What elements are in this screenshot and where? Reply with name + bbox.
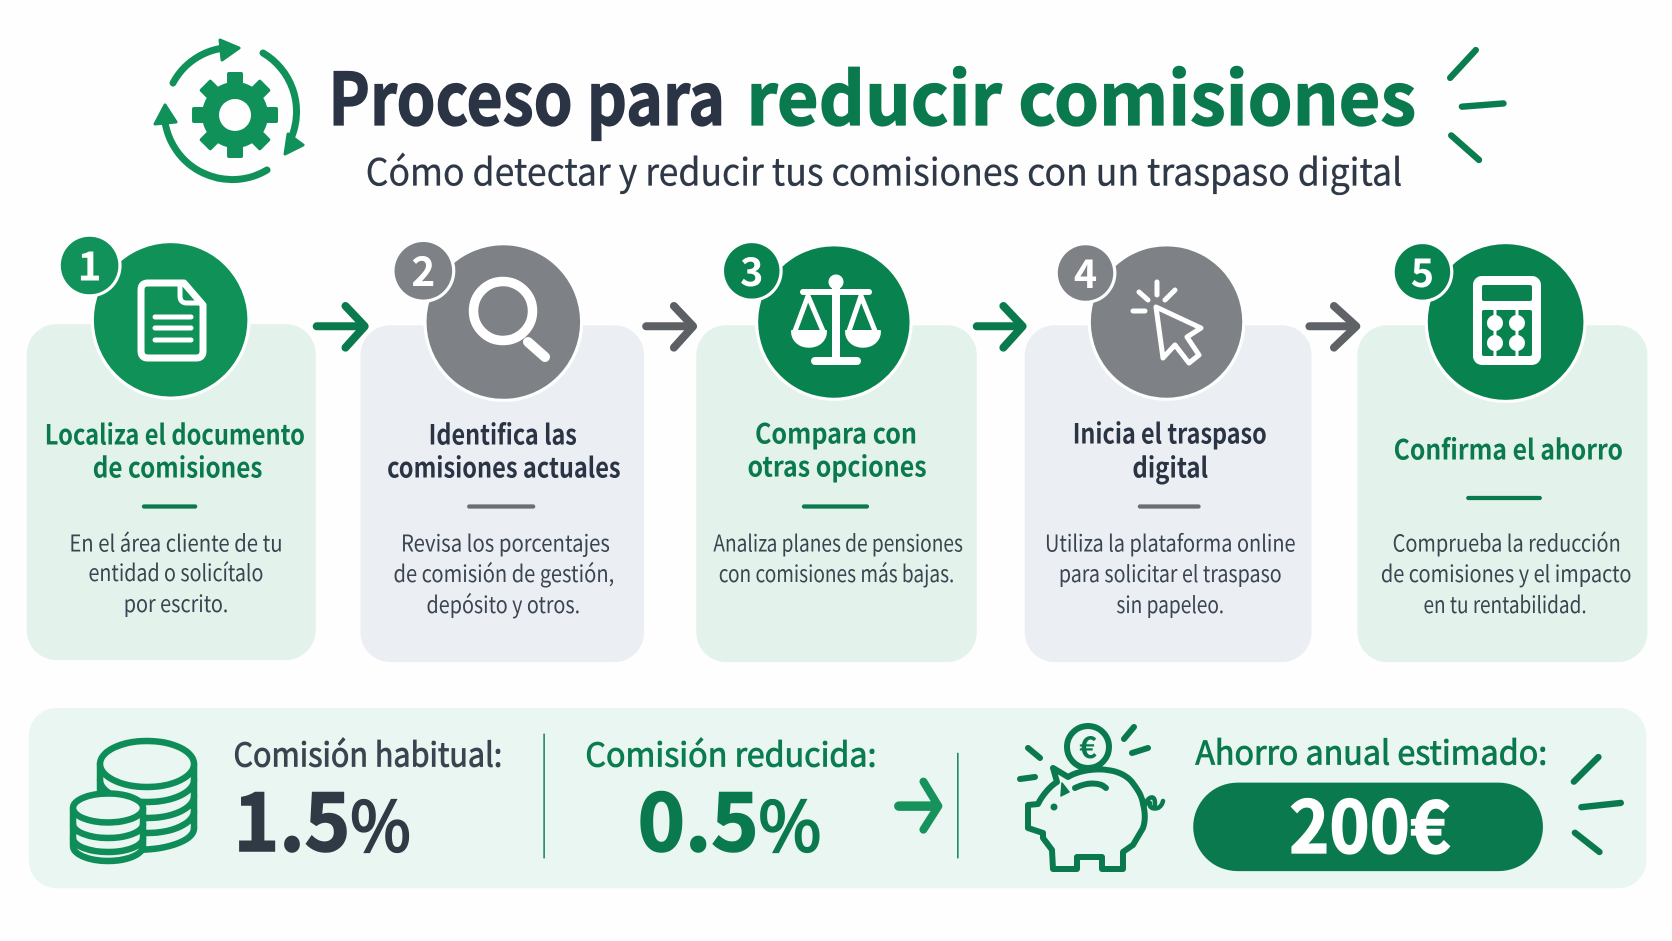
step number 2 [391, 239, 455, 303]
divider [467, 504, 535, 509]
value pill: 200€ [1193, 769, 1543, 874]
step number 1: 1 [78, 233, 102, 292]
divider [142, 504, 197, 509]
arrow 1 [317, 306, 365, 348]
description: de comisiones y el impacto [1381, 555, 1631, 589]
heading: comisiones actuales [387, 446, 621, 486]
heading: digital [1132, 446, 1208, 486]
heading: otras opciones [747, 445, 927, 485]
bottom summary panel [29, 708, 1646, 888]
heading: Identifica las [429, 413, 577, 453]
description: Revisa los porcentajes [401, 524, 610, 558]
icon circle: document [91, 240, 251, 400]
icon: coin stacks [73, 741, 194, 861]
step number 5: 5 [1411, 242, 1434, 299]
icon: piggy bank with euro coin [1020, 723, 1163, 869]
icon circle: magnifier [423, 242, 583, 402]
vertical divider [957, 753, 959, 858]
description: de comisión de gestión, [393, 555, 614, 589]
heading: de comisiones [93, 446, 262, 486]
card background [1357, 325, 1647, 662]
label: estimated annual saving: Ahorro anual estimado: [1195, 727, 1547, 775]
description: en tu rentabilidad. [1424, 586, 1587, 620]
description: con comisiones más bajas. [719, 555, 954, 589]
vertical divider [543, 734, 545, 858]
step number 4: 4 [1074, 243, 1097, 300]
title: Proceso para [328, 41, 725, 146]
arrow 3 [977, 306, 1023, 348]
label: usual fee: Comisión habitual: [234, 729, 502, 777]
panel background [29, 708, 1646, 888]
value: 1.5%: 1.5% [234, 758, 411, 875]
step number 2: 2 [411, 239, 435, 298]
step 2 panel [360, 239, 644, 662]
title: reducir comisiones [746, 41, 1416, 146]
title spark rays [1450, 50, 1503, 160]
description: Utiliza la plataforma online [1045, 524, 1296, 558]
icon circle: calculator [1425, 241, 1587, 403]
step number 1 [58, 233, 122, 297]
step number 3 [721, 240, 783, 302]
heading: Localiza el documento [45, 413, 305, 453]
spark rays [1574, 757, 1621, 852]
arrow 4 [1309, 306, 1356, 348]
icon circle: cursor click [1088, 243, 1245, 401]
description: por escrito. [124, 585, 228, 619]
description: sin papeleo. [1116, 586, 1224, 620]
step 5 panel [1357, 241, 1647, 662]
heading: Inicia el traspaso [1073, 412, 1267, 452]
icon: piggy bank with euro coin: € [1079, 723, 1097, 767]
card background [1025, 325, 1312, 662]
divider [1138, 504, 1201, 509]
step number 5 [1392, 241, 1453, 303]
step number 4 [1055, 242, 1116, 304]
divider [1466, 496, 1542, 500]
card background [27, 324, 316, 660]
icon circle: balance scale [755, 243, 913, 401]
subtitle: Cómo detectar y reducir tus comisiones con un traspaso digital [366, 143, 1402, 197]
step 1 panel [27, 233, 316, 660]
card background [360, 325, 644, 662]
value pill: 200€: 200€ [1289, 769, 1450, 874]
heading: Confirma el ahorro [1394, 428, 1623, 468]
description: entidad o solicítalo [89, 554, 263, 588]
arrow 2 [646, 306, 693, 348]
step 4 panel [1025, 242, 1312, 662]
description: Analiza planes de pensiones [713, 524, 963, 558]
description: depósito y otros. [427, 586, 580, 620]
heading: Compara con [755, 412, 917, 452]
label: reduced fee: Comisión reducida: [585, 729, 877, 777]
description: Comprueba la reducción [1393, 524, 1621, 558]
step number 3: 3 [740, 241, 763, 298]
step 3 panel [696, 240, 977, 662]
description: para solicitar el traspaso [1059, 555, 1282, 589]
arrow [899, 782, 938, 830]
divider [802, 504, 869, 509]
description: En el área cliente de tu [69, 524, 283, 558]
value: 0.5%: 0.5% [638, 758, 821, 875]
header icon: gear with cycle arrows [155, 40, 303, 180]
card background [696, 325, 977, 662]
